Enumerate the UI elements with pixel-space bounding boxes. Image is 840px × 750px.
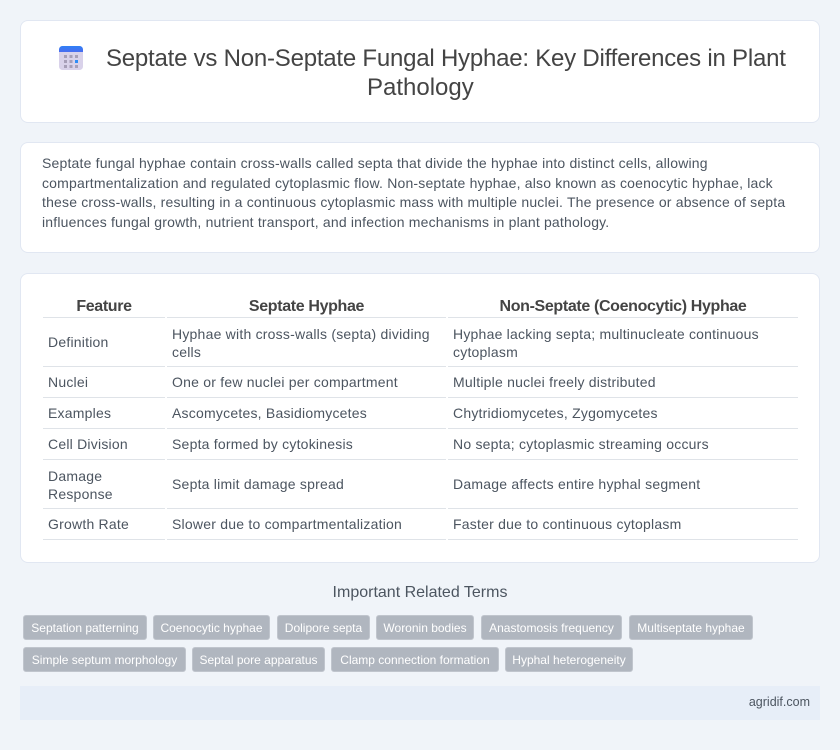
table header: Feature — [76, 298, 132, 315]
row: definition — [48, 326, 759, 360]
intro paragraph: these cross-walls, resulting in a continuous cytoplasmic mass with multiple nuclei. The presence or absence of septa — [42, 194, 785, 210]
tags: related terms: Multiseptate hyphae — [637, 621, 745, 635]
row: examples: Chytridiomycetes, Zygomycetes — [453, 405, 658, 421]
tags: related terms: Septal pore apparatus — [199, 653, 318, 667]
table header — [76, 298, 746, 315]
row: cell division: Cell Division — [48, 436, 128, 452]
title: Pathology — [367, 74, 474, 101]
panel: comparison table — [20, 273, 820, 563]
tags: related terms — [23, 615, 753, 672]
table header: Non-Septate (Coenocytic) Hyphae — [500, 298, 746, 315]
row: damage response: Response — [48, 486, 113, 502]
row: definition: cytoplasm — [453, 344, 518, 360]
row: definition: Hyphae lacking septa; multinucleate continuous — [453, 326, 759, 342]
intro paragraph: influences fungal growth, nutrient transport, and infection mechanisms in plant pathology. — [42, 214, 609, 230]
row: damage response: Damage affects entire hyphal segment — [453, 476, 700, 492]
row: examples — [48, 405, 658, 421]
intro paragraph — [42, 155, 786, 230]
row: examples: Ascomycetes, Basidiomycetes — [172, 405, 367, 421]
tags: related terms: Clamp connection formation — [340, 653, 490, 667]
row: definition: cells — [172, 344, 201, 360]
row: definition: Definition — [48, 334, 109, 350]
row: growth rate — [48, 516, 682, 532]
row: damage response: Septa limit damage spread — [172, 476, 344, 492]
tags: related terms: Anastomosis frequency — [489, 621, 614, 635]
tags: related terms: Hyphal heterogeneity — [512, 653, 626, 667]
tags: related terms: Septation patterning — [31, 621, 139, 635]
icon: calendar — [59, 46, 83, 70]
table header: Septate Hyphae — [249, 298, 364, 315]
intro paragraph: Septate fungal hyphae contain cross-walls called septa that divide the hyphae into distinct cells, allowing — [42, 155, 708, 171]
row: cell division: Septa formed by cytokinesis — [172, 436, 353, 452]
row: nuclei — [48, 374, 656, 390]
row: cell division — [48, 436, 709, 452]
intro paragraph: compartmentalization and regulated cytoplasmic flow. Non-septate hyphae, also known as coenocytic hyphae, lack — [42, 175, 773, 191]
row: nuclei: Multiple nuclei freely distributed — [453, 374, 656, 390]
row: growth rate: Slower due to compartmentalization — [172, 516, 402, 532]
row: nuclei: Nuclei — [48, 374, 88, 390]
title: Septate vs Non-Septate Fungal Hyphae: Key Differences in Plant — [106, 45, 786, 72]
panel: intro text — [20, 142, 820, 253]
row: damage response — [48, 468, 700, 502]
row: cell division: No septa; cytoplasmic streaming occurs — [453, 436, 709, 452]
panel: title card — [20, 20, 820, 123]
row: examples: Examples — [48, 405, 111, 421]
tags: related terms: Coenocytic hyphae — [160, 621, 263, 635]
tags: related terms: Woronin bodies — [383, 621, 467, 635]
row: nuclei: One or few nuclei per compartment — [172, 374, 398, 390]
row: growth rate: Faster due to continuous cytoplasm — [453, 516, 682, 532]
footer source: agridif.com — [749, 695, 810, 709]
tags: related terms: Simple septum morphology — [32, 653, 177, 667]
footer bar — [20, 686, 820, 720]
title — [106, 45, 786, 101]
heading: related terms: Important Related Terms — [333, 584, 507, 601]
tags: related terms: Dolipore septa — [285, 621, 362, 635]
row: growth rate: Growth Rate — [48, 516, 129, 532]
row: damage response: Damage — [48, 468, 102, 484]
row: definition: Hyphae with cross-walls (septa) dividing — [172, 326, 430, 342]
